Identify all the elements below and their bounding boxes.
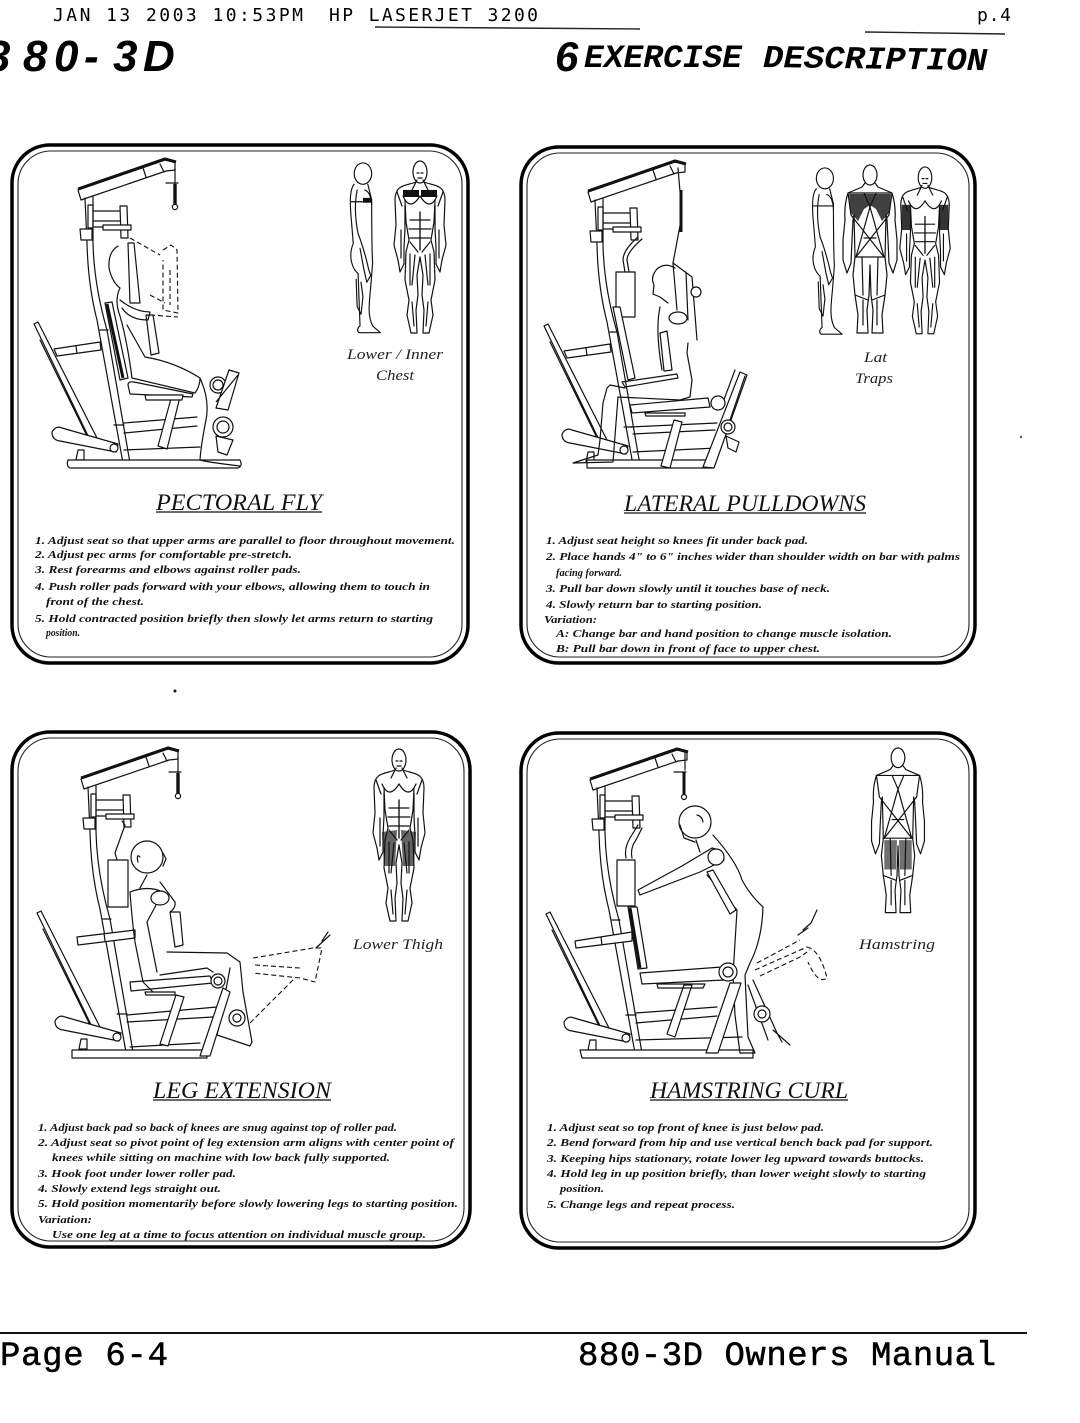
muscle figure: back view, hamstrings highlighted — [872, 748, 924, 913]
muscle label: Hamstring — [858, 937, 936, 953]
heading: LEG EXTENSION — [152, 1078, 333, 1103]
muscle figure: front view, arms highlighted — [900, 167, 950, 334]
print header date: JAN 13 2003 10:53PM — [53, 5, 303, 26]
instructions: front of the chest. — [46, 597, 144, 608]
footer: manual name: 880-3D Owners Manual — [578, 1338, 996, 1376]
instructions: 2. Place hands 4" to 6" inches wider than shoulder width on bar with palms — [545, 552, 960, 563]
instructions: 4. Slowly return bar to starting position. — [545, 600, 762, 611]
instructions: position. — [45, 628, 80, 639]
instructions: 1. Adjust seat so that upper arms are parallel to floor throughout movement. — [35, 536, 455, 547]
instructions: B: Pull bar down in front of face to upper chest. — [555, 644, 820, 655]
illustration: machine with seated user extending legs — [37, 748, 330, 1058]
instructions: 2. Adjust seat so pivot point of leg extension arm aligns with center point of — [37, 1138, 456, 1149]
page number: p.4 — [977, 5, 1011, 26]
instructions: 1. Adjust back pad so back of knees are snug against top of roller pad. — [38, 1123, 397, 1134]
instructions: facing forward. — [556, 568, 622, 579]
instructions: 5. Change legs and repeat process. — [547, 1200, 735, 1211]
instructions: 4. Slowly extend legs straight out. — [37, 1184, 221, 1195]
muscle figure: side view — [813, 168, 842, 334]
muscle label — [855, 350, 893, 387]
instructions — [34, 536, 455, 639]
section number: 6 — [555, 33, 579, 80]
panel: lateral pulldowns — [521, 147, 975, 663]
panel: hamstring curl — [521, 733, 975, 1248]
muscle label — [346, 347, 443, 384]
panel frame — [521, 733, 975, 1248]
section title: description: DESCRIPTION — [763, 40, 988, 80]
instructions: Variation: — [544, 615, 597, 626]
instructions: 1. Adjust seat height so knees fit under back pad. — [546, 536, 808, 547]
muscle figure: front view, chest highlighted — [394, 161, 446, 333]
illustration: machine with seated user pulling bar — [544, 161, 747, 468]
muscle label: Lat — [863, 350, 888, 366]
instructions: 5. Hold contracted position briefly then slowly let arms return to starting — [35, 614, 433, 625]
section title: exercise: EXERCISE — [584, 40, 743, 77]
instructions: 3. Pull bar down slowly until it touches base of neck. — [545, 584, 830, 595]
muscle figure: side view — [350, 163, 380, 333]
instructions: position. — [559, 1184, 604, 1195]
instructions: 3. Hook foot under lower roller pad. — [37, 1169, 236, 1180]
muscle label: Lower Thigh — [352, 937, 443, 953]
instructions: 2. Adjust pec arms for comfortable pre-stretch. — [34, 550, 292, 561]
footer: page number: Page 6-4 — [0, 1338, 168, 1376]
illustration: machine with seated user — [34, 159, 241, 468]
instructions: Use one leg at a time to focus attention on individual muscle group. — [52, 1230, 426, 1241]
illustration: machine with standing user curling leg — [546, 749, 827, 1058]
instructions — [37, 1123, 458, 1241]
panel frame — [521, 147, 975, 663]
heading: HAMSTRING CURL — [649, 1078, 848, 1103]
panel frame — [12, 145, 468, 663]
muscle figure: back view, lats and traps highlighted — [843, 165, 897, 333]
instructions — [546, 1123, 933, 1211]
instructions: 4. Hold leg in up position briefly, than lower weight slowly to starting — [546, 1169, 926, 1180]
instructions: 5. Hold position momentarily before slowly lowering legs to starting position. — [38, 1199, 458, 1210]
panel frame — [12, 732, 470, 1247]
heading: PECTORAL FLY — [155, 490, 324, 515]
panel: pectoral fly — [12, 145, 468, 663]
muscle label: Lower / Inner — [346, 347, 443, 363]
muscle label: Chest — [376, 368, 415, 384]
instructions — [544, 536, 960, 655]
muscle figure: front view, thighs highlighted — [373, 749, 425, 921]
instructions: 3. Rest forearms and elbows against roller pads. — [34, 565, 301, 576]
heading: LATERAL PULLDOWNS — [623, 491, 867, 516]
instructions: knees while sitting on machine with low back fully supported. — [52, 1153, 390, 1164]
instructions: 2. Bend forward from hip and use vertical bench back pad for support. — [546, 1138, 933, 1149]
instructions: 4. Push roller pads forward with your elbows, allowing them to touch in — [34, 582, 430, 593]
instructions: 3. Keeping hips stationary, rotate lower leg upward towards buttocks. — [546, 1154, 924, 1165]
instructions: 1. Adjust seat so top front of knee is just below pad. — [547, 1123, 824, 1134]
instructions: Variation: — [38, 1215, 92, 1226]
muscle label: Traps — [855, 371, 893, 387]
print header printer name: HP LASERJET 3200 — [329, 5, 538, 26]
panel: leg extension — [12, 732, 470, 1247]
instructions: A: Change bar and hand position to change muscle isolation. — [555, 629, 892, 640]
